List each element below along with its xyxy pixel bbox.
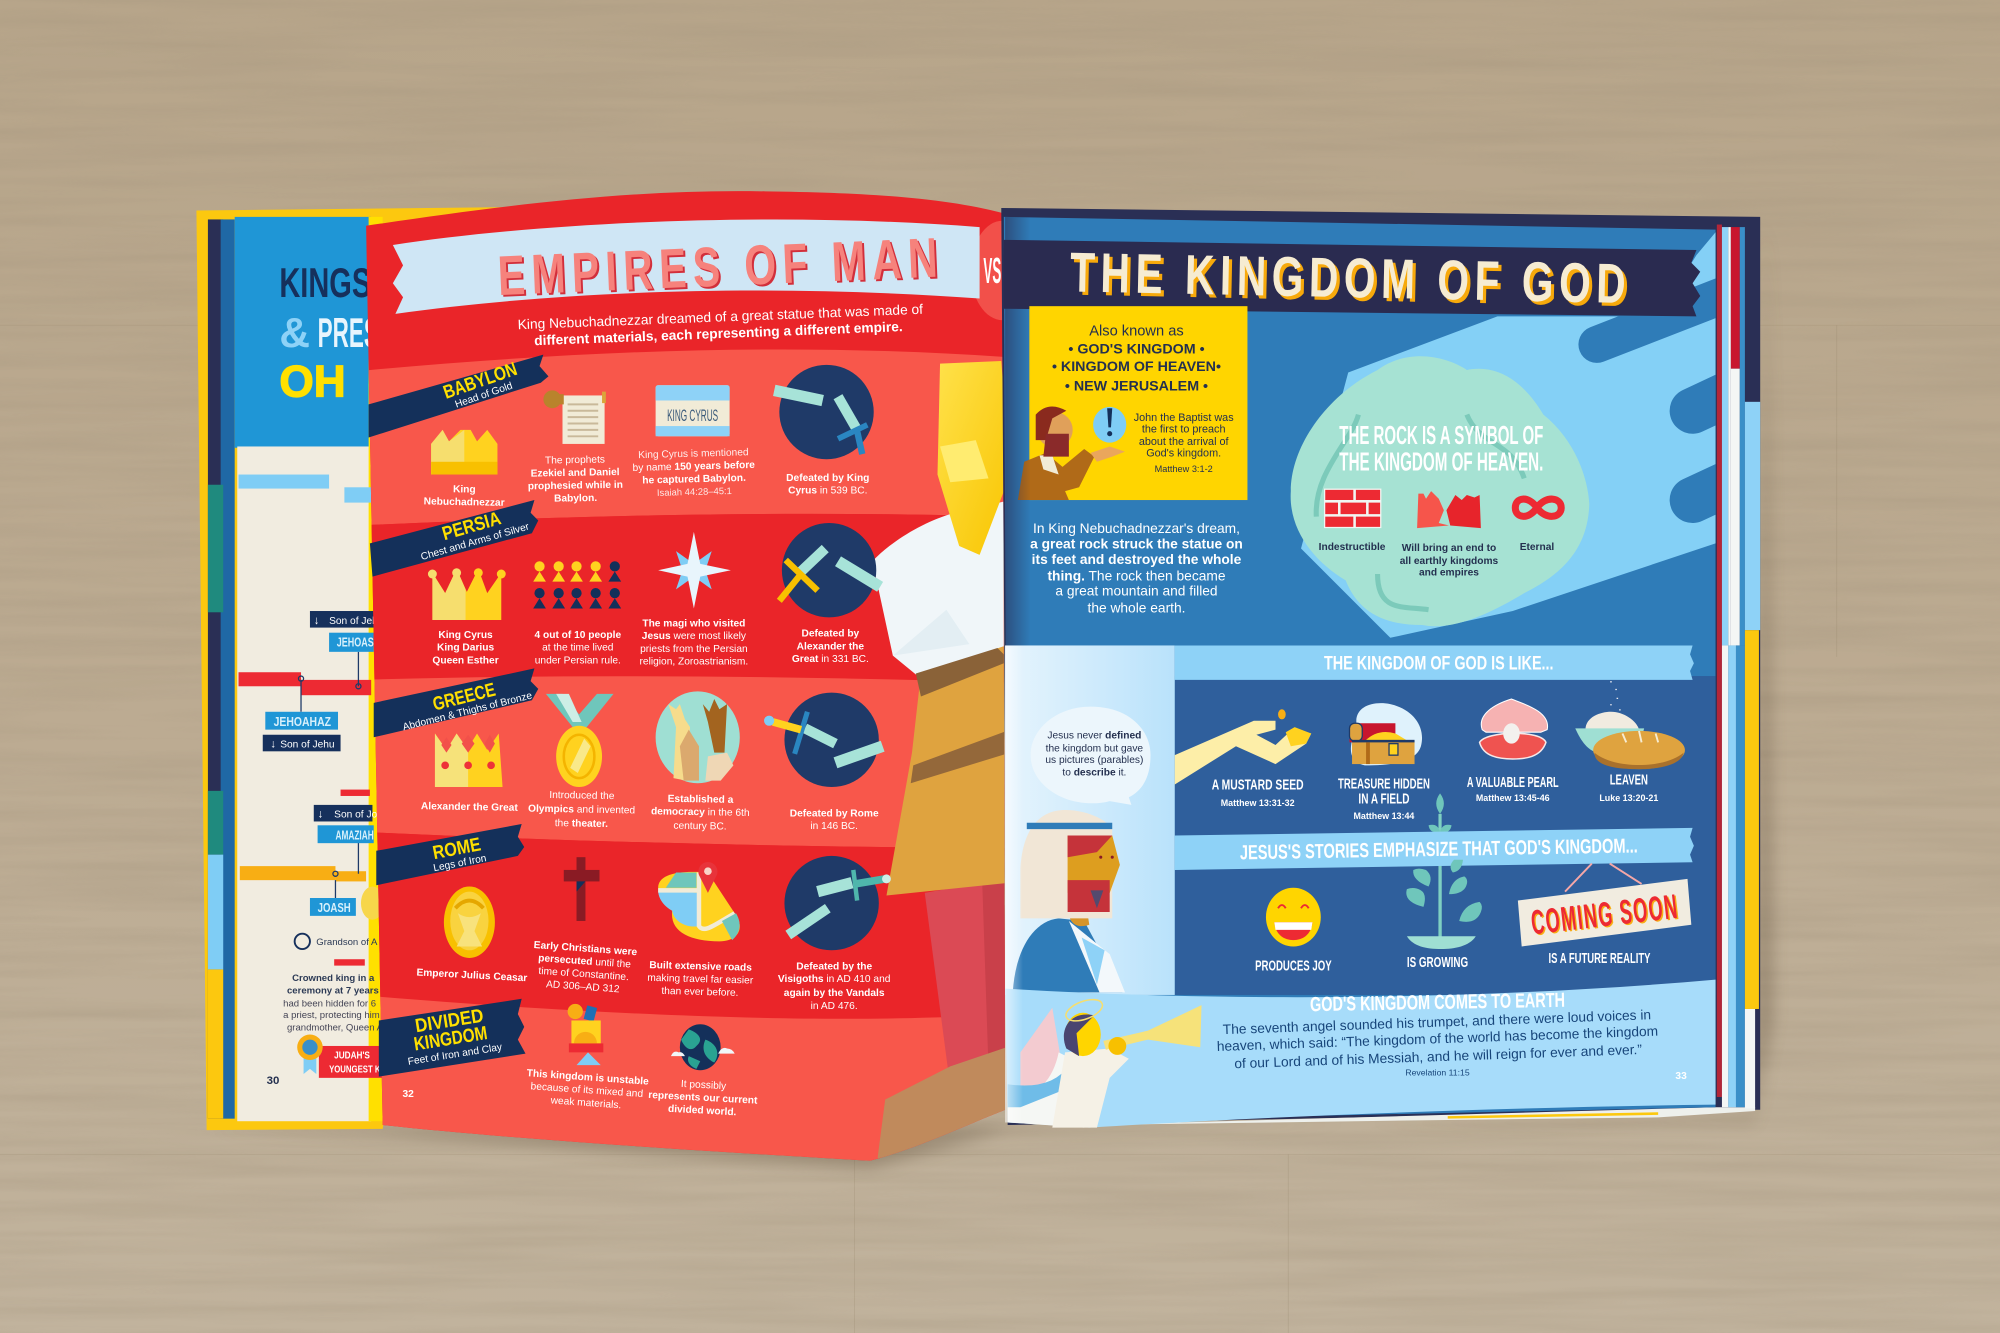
text	[790, 808, 879, 832]
text: The prophets	[545, 455, 605, 467]
text	[632, 447, 756, 499]
babylon band	[357, 349, 1008, 526]
icon: name card	[656, 385, 730, 436]
text: Great in 331 BC.	[792, 654, 869, 665]
timeline bars and name tags: Crowned king in a	[292, 973, 375, 984]
label	[432, 630, 499, 666]
timeline bars and name tags: JEHOAHAZ	[274, 714, 331, 729]
icon: crown	[428, 568, 506, 620]
panel: empires of man page	[357, 179, 1034, 1174]
text: divided world.	[668, 1104, 737, 1118]
text: about the arrival of	[1139, 436, 1230, 448]
timeline bars and name tags: ↓	[270, 738, 276, 750]
book shadow	[210, 217, 1773, 1168]
text: It possibly	[681, 1079, 727, 1092]
page heading fragments: &	[279, 309, 310, 356]
panel: the rock	[1291, 356, 1589, 626]
icon: angel	[1008, 995, 1202, 1128]
text: religion, Zoroastrianism.	[640, 657, 748, 668]
page number: 33	[1675, 1071, 1687, 1082]
icon: cross	[564, 857, 599, 921]
text: God's kingdom.	[1146, 448, 1221, 460]
section: greece	[374, 668, 883, 833]
icon: infinity	[1515, 499, 1561, 516]
icon: name card: KING CYRUS	[667, 406, 718, 425]
labels: Indestructible	[1319, 542, 1386, 553]
text	[647, 960, 754, 999]
icon: ten people	[533, 561, 621, 608]
parable: leaven: Luke 13:20-21	[1599, 793, 1658, 803]
citation: Revelation 11:15	[1405, 1067, 1470, 1077]
text: Ezekiel and Daniel	[531, 467, 620, 480]
figure: jesus	[1013, 810, 1125, 992]
timeline bars and name tags: ↓	[314, 615, 320, 627]
timeline bars and name tags: 30	[267, 1075, 279, 1087]
text	[528, 790, 636, 831]
back cover and page stack, left	[196, 207, 548, 1130]
icon: coin	[444, 887, 495, 958]
text: the theater.	[555, 818, 608, 830]
parable: treasure: IN A FIELD	[1358, 792, 1409, 808]
icon: broken sword	[779, 523, 880, 617]
text	[525, 1068, 649, 1113]
timeline bars and name tags: Son of Jo	[334, 810, 378, 821]
text: Established a	[668, 794, 734, 806]
fingers	[1597, 291, 1747, 500]
persia band	[357, 514, 1008, 682]
icon: broken sword	[774, 365, 874, 459]
text: Visigoths in AD 410 and	[778, 974, 891, 985]
banner: the kingdom of god is like: THE KINGDOM OF GOD IS LIKE...	[1324, 653, 1554, 675]
text: This kingdom is unstable	[526, 1068, 649, 1088]
timeline bars and name tags: Grandson of A	[316, 937, 378, 948]
light beam arm	[1301, 232, 1716, 638]
parable: mustard seed: Matthew 13:31-32	[1221, 798, 1295, 808]
intro text: different materials, each representing a different empire.	[534, 319, 903, 348]
text: by name 150 years before	[632, 460, 755, 474]
text: nebuchadnezzar's dream: a great rock struck the statue on	[1030, 537, 1243, 552]
parable: pearl: Matthew 13:45-46	[1476, 793, 1550, 803]
timeline bars and name tags: JOASH	[318, 900, 351, 915]
text	[786, 473, 869, 497]
text: at the time lived	[542, 643, 614, 654]
label: Emperor Julius Ceasar	[416, 967, 528, 984]
text: in AD 476.	[811, 1001, 858, 1012]
statue	[872, 361, 1010, 1158]
speech bubble: the kingdom but gave	[1046, 743, 1143, 754]
icon: bricks	[1324, 489, 1381, 528]
item: produces joy: PRODUCES JOY	[1255, 959, 1332, 975]
title banner	[1004, 240, 1700, 318]
timeline bars and name tags: grandmother, Queen A	[287, 1023, 384, 1034]
text: persecuted until the	[538, 953, 632, 971]
text: democracy in the 6th	[651, 806, 750, 819]
parable: treasure: TREASURE HIDDEN	[1338, 776, 1430, 792]
page base	[1004, 217, 1716, 1122]
text: making travel far easier	[647, 973, 754, 987]
text: Alexander the	[797, 641, 864, 652]
text	[531, 940, 638, 996]
title banner	[393, 220, 980, 314]
text: under Persian rule.	[535, 655, 621, 666]
icon: raised hands	[656, 691, 740, 783]
callout: also known as: Also known as	[1089, 324, 1184, 340]
text: Defeated by	[801, 629, 860, 640]
text	[778, 961, 891, 1012]
divided band	[380, 996, 1004, 1161]
text: than ever before.	[661, 986, 739, 999]
text: nebuchadnezzar's dream: thing. The rock then became	[1047, 568, 1226, 583]
callout: also known as: • KINGDOM OF HEAVEN•	[1052, 359, 1221, 375]
text	[1134, 412, 1234, 474]
speech bubble: to describe it.	[1062, 768, 1126, 779]
text: Introduced the	[549, 790, 615, 802]
icon: earth	[671, 1024, 735, 1070]
text: Defeated by King	[786, 473, 869, 484]
parable: leaven: LEAVEN	[1610, 772, 1648, 788]
greece band	[357, 676, 1008, 848]
intro text: King Nebuchadnezzar dreamed of a great statue that was made of	[517, 302, 923, 332]
text: represents our current	[648, 1090, 758, 1107]
text: again by the Vandals	[784, 988, 885, 999]
icon: medal	[546, 694, 614, 787]
text: nebuchadnezzar's dream: the whole earth.	[1088, 600, 1185, 615]
text: Defeated by Rome	[790, 808, 879, 819]
timeline bars and name tags: YOUNGEST KI	[329, 1065, 383, 1076]
text: in 146 BC.	[810, 821, 858, 832]
scripture	[1216, 1007, 1659, 1072]
banner: divided kingdom: DIVIDED	[414, 1006, 485, 1037]
banner: babylon: BABYLON	[441, 359, 520, 404]
icon: map	[658, 862, 740, 941]
banner: greece: Abdomen & Thighs of Bronze	[402, 690, 534, 733]
title: EMPIRES OF MAN	[496, 225, 945, 307]
text: weak materials.	[549, 1095, 622, 1111]
scripture: of our Lord and of his Messiah, and he will reign for ever and ever.”	[1234, 1042, 1643, 1071]
callout: also known as	[1018, 306, 1247, 500]
timeline bars and name tags: ↓	[318, 809, 323, 821]
text	[647, 1077, 759, 1119]
panel: jesus	[1005, 645, 1175, 995]
text: Babylon.	[554, 493, 597, 505]
page heading fragments: PRES	[318, 309, 379, 356]
banner: babylon: Head of Gold	[454, 381, 514, 411]
banner: babylon	[369, 355, 548, 438]
text: Jesus were most likely	[642, 631, 747, 642]
section: babylon	[369, 355, 874, 509]
callout: also known as: • GOD'S KINGDOM •	[1068, 341, 1205, 357]
vs badge	[971, 221, 1034, 320]
item: is growing	[1406, 860, 1482, 971]
timeline bars and name tags	[239, 475, 384, 1087]
text	[651, 793, 750, 833]
text: Defeated by the	[796, 961, 872, 972]
item: is growing: IS GROWING	[1407, 955, 1468, 971]
item: future reality sign: IS A FUTURE REALITY	[1548, 951, 1651, 967]
heading	[1339, 422, 1543, 477]
icon: broken sword	[764, 693, 883, 787]
parable: treasure	[1338, 703, 1430, 821]
timeline bars and name tags: JEHOAS	[337, 635, 374, 650]
label	[424, 484, 505, 509]
panel: parables background	[1175, 676, 1716, 995]
banner: persia	[370, 500, 538, 577]
timeline bars and name tags: ceremony at 7 years	[287, 986, 379, 997]
label: Queen Esther	[432, 655, 499, 666]
text: nebuchadnezzar's dream	[1030, 521, 1243, 615]
banner: divided kingdom	[379, 999, 526, 1077]
banner: divided kingdom: KINGDOM	[412, 1023, 489, 1055]
icon: broken sword	[784, 856, 891, 950]
banner: persia: PERSIA	[440, 508, 504, 545]
icon: broken castle	[1417, 491, 1481, 528]
parable: mustard seed	[1175, 709, 1311, 808]
vs badge: VS	[983, 251, 1001, 291]
banner: persia: Chest and Arms of Silver	[420, 521, 531, 563]
text: Isaiah 44:28–45:1	[657, 485, 732, 498]
banner: rome: Legs of Iron	[433, 853, 487, 874]
icon: crown	[431, 430, 497, 475]
icon: exclamation	[1093, 407, 1126, 443]
text: time of Constantine.	[538, 966, 629, 983]
text: Cyrus in 539 BC.	[788, 486, 867, 497]
section: persia	[370, 500, 880, 668]
banner: jesus's stories: JESUS'S STORIES EMPHASIZE THAT GOD'S KINGDOM...	[1240, 835, 1638, 864]
banner: greece	[374, 668, 538, 737]
page heading fragments: OH	[279, 358, 346, 407]
label: Nebuchadnezzar	[424, 496, 505, 509]
page number: 32	[402, 1089, 414, 1100]
title: EMPIRES OF MAN	[498, 227, 947, 309]
section: rome	[376, 824, 891, 1012]
text: he captured Babylon.	[642, 473, 746, 487]
parable: mustard seed: A MUSTARD SEED	[1212, 778, 1304, 794]
section: divided kingdom	[379, 999, 759, 1119]
page heading fragments	[280, 268, 368, 398]
scripture: heaven, which said: “The kingdom of the world has become the kingdom	[1217, 1024, 1658, 1054]
banner: greece: GREECE	[431, 680, 498, 715]
timeline bars and name tags: a priest, protecting him	[283, 1010, 380, 1021]
text: century BC.	[673, 821, 727, 833]
icon: star	[658, 532, 731, 608]
text: 4 out of 10 people	[535, 630, 621, 641]
banner: the kingdom of god is like	[1175, 645, 1694, 680]
page gutter shading	[1005, 217, 1031, 645]
intro text	[517, 302, 924, 349]
text: prophesied while in	[528, 480, 623, 492]
text: Built extensive roads	[649, 960, 752, 974]
banner: rome	[376, 824, 524, 885]
item: future reality sign: COMING SOON	[1531, 889, 1682, 943]
banner: rome: ROME	[431, 834, 483, 864]
speech bubble	[1031, 707, 1151, 805]
label: King	[453, 484, 476, 496]
text	[535, 630, 621, 666]
timeline bars and name tags: JUDAH'S	[334, 1051, 370, 1062]
labels: and empires	[1419, 567, 1479, 578]
text: priests from the Persian	[640, 644, 748, 655]
title: THE KINGDOM OF GOD	[1070, 240, 1632, 315]
heading: THE KINGDOM OF HEAVEN.	[1339, 449, 1543, 477]
text: Matthew 3:1-2	[1155, 464, 1213, 474]
text: the first to preach	[1142, 423, 1226, 435]
parable: treasure: Matthew 13:44	[1353, 811, 1414, 821]
text: nebuchadnezzar's dream: a great mountain and filled	[1055, 584, 1218, 599]
text: Early Christians were	[533, 940, 638, 958]
text	[640, 618, 748, 668]
timeline bars and name tags: Son of Jeh	[329, 616, 378, 627]
item: future reality sign	[1518, 864, 1691, 967]
text: Olympics and invented	[528, 804, 636, 816]
text: King Cyrus is mentioned	[638, 447, 749, 461]
banner: jesus's stories	[1175, 828, 1694, 870]
heading: THE ROCK IS A SYMBOL OF	[1339, 422, 1543, 450]
panel: god's kingdom comes to earth	[1005, 980, 1716, 1128]
banner: divided kingdom: Feet of Iron and Clay	[407, 1042, 504, 1068]
icon: scroll	[543, 390, 606, 444]
rome band	[377, 832, 1005, 997]
item: future reality sign: COMING SOON	[1529, 888, 1680, 942]
labels: Eternal	[1520, 542, 1554, 553]
icon: john the baptist	[1018, 406, 1125, 500]
icon: unstable figure	[568, 1004, 603, 1065]
labels: all earthly kingdoms	[1400, 556, 1499, 567]
title: THE KINGDOM OF GOD	[1073, 244, 1635, 318]
label: Alexander the Great	[421, 801, 518, 814]
text	[792, 629, 869, 665]
speech bubble: Jesus never defined	[1047, 731, 1141, 742]
page heading fragments: KINGS	[279, 259, 371, 306]
labels: Will bring an end to	[1402, 543, 1496, 554]
speech bubble: us pictures (parables)	[1045, 755, 1143, 766]
callout: also known as: • NEW JERUSALEM •	[1065, 378, 1208, 394]
parable: pearl	[1467, 699, 1559, 803]
text	[527, 454, 623, 505]
text: nebuchadnezzar's dream: In King Nebuchadnezzar's dream,	[1033, 521, 1240, 536]
label: King Darius	[437, 643, 494, 654]
title	[496, 225, 947, 309]
text: The magi who visited	[642, 618, 745, 629]
panel: the kingdom of god page	[1001, 208, 1760, 1128]
timeline bars and name tags: Son of Jehu	[280, 739, 335, 750]
parable: leaven	[1575, 681, 1685, 803]
page base	[357, 179, 1020, 1174]
text: AD 306–AD 312	[546, 979, 620, 995]
label: King Cyrus	[438, 630, 493, 641]
timeline bars and name tags: had been hidden for 6	[283, 998, 376, 1009]
hardcover and right edge strips	[1001, 208, 1760, 1125]
scripture: The seventh angel sounded his trumpet, and there were loud voices in	[1222, 1007, 1651, 1037]
heading: GOD'S KINGDOM COMES TO EARTH	[1310, 990, 1565, 1016]
timeline bars and name tags: AMAZIAH	[335, 827, 374, 842]
labels	[1319, 542, 1554, 578]
parable: pearl: A VALUABLE PEARL	[1467, 775, 1559, 791]
panel: kings and prophets page (partly hidden)	[235, 217, 384, 1121]
text: because of its mixed and	[530, 1081, 644, 1100]
icon: crown	[435, 733, 503, 787]
plant: growing (top)	[1429, 793, 1452, 944]
text: nebuchadnezzar's dream: its feet and destroyed the whole	[1032, 552, 1242, 567]
item: produces joy	[1255, 888, 1332, 975]
text: John the Baptist was	[1134, 412, 1234, 424]
